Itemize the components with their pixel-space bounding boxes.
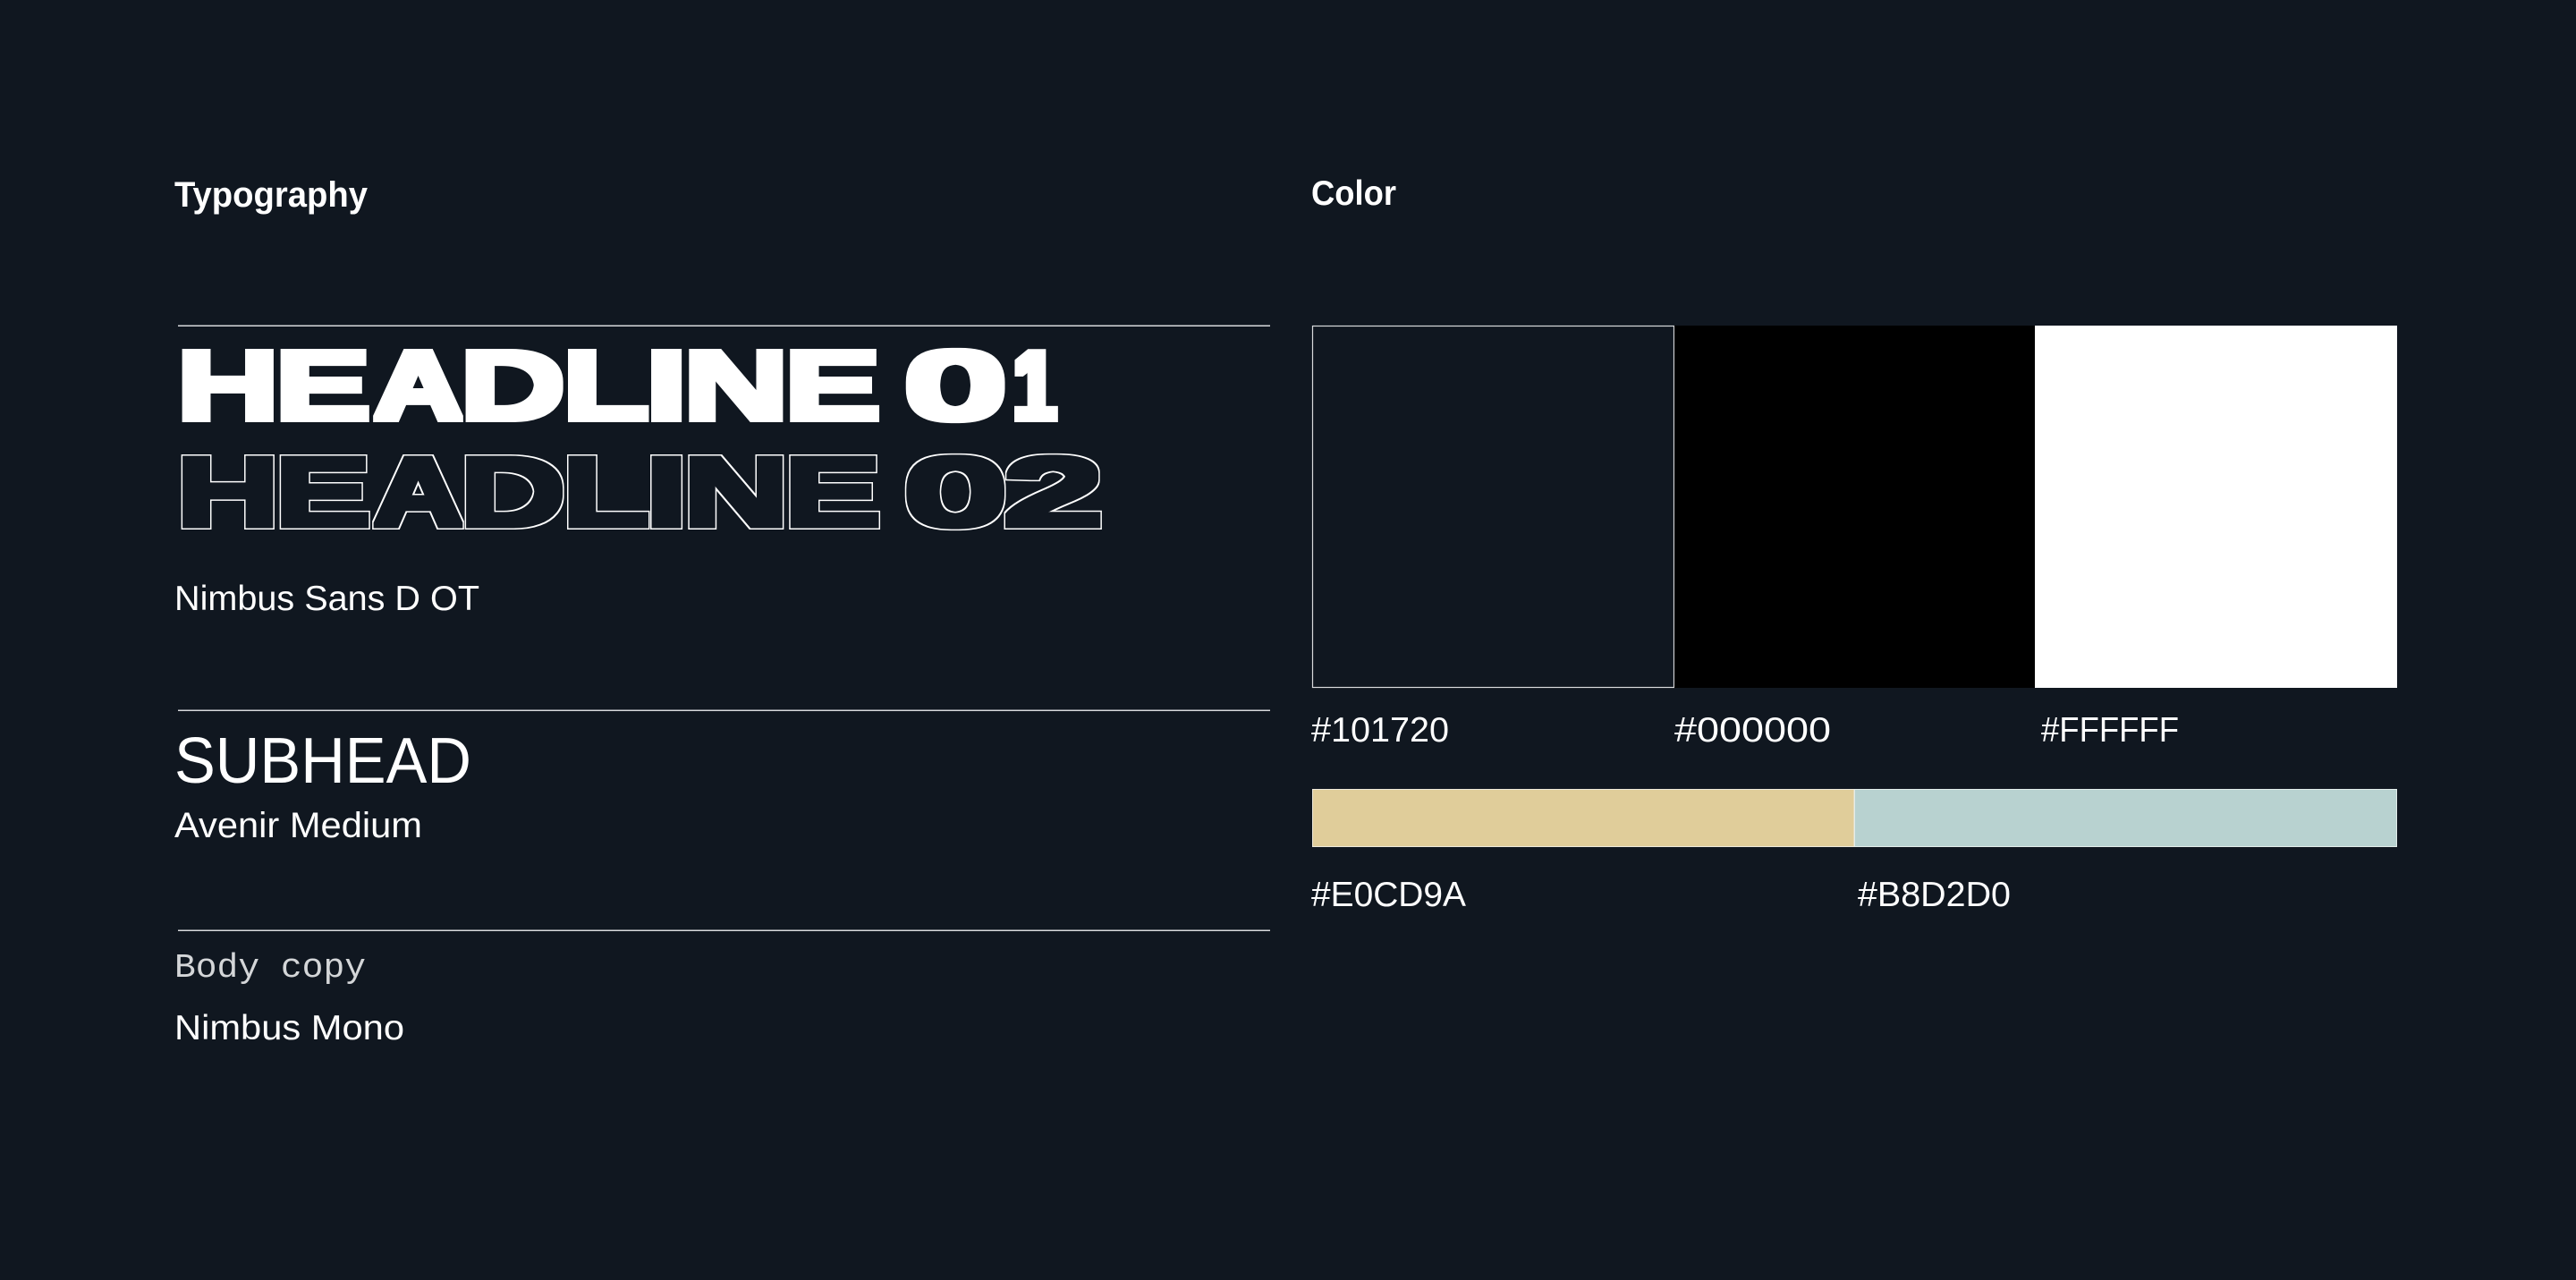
swatch: dark navy [1313, 326, 1674, 687]
label: #E0CD9A: #E0CD9A [1311, 876, 1466, 914]
headline 01 sample: E [275, 331, 371, 440]
font name: Nimbus Sans D OT: Nimbus Sans D OT [174, 580, 479, 618]
headline 01 sample: I [645, 331, 688, 440]
swatch: black [1674, 326, 2035, 688]
panel: typography [174, 175, 1270, 1047]
headline 02 outlined sample: H [177, 438, 279, 547]
font name: Nimbus Mono: Nimbus Mono [174, 1009, 404, 1047]
headline 02 outlined sample: N [683, 438, 789, 547]
headline 02 outlined sample: 2 [1003, 438, 1105, 547]
headline 02 outlined sample: A [374, 438, 462, 547]
headline 02 outlined sample: L [563, 438, 649, 547]
divider: subhead top [178, 710, 1270, 711]
headline 02 outlined sample: E [275, 438, 371, 547]
headline 02 outlined sample: D [460, 438, 565, 547]
label: #FFFFFF: #FFFFFF [2041, 711, 2179, 750]
divider: body copy top [178, 930, 1270, 931]
font name: Avenir Medium: Avenir Medium [174, 806, 422, 845]
heading: Color: Color [1311, 174, 1396, 213]
headline 01 sample: H [177, 331, 279, 440]
headline 02 outlined sample: E [784, 438, 881, 547]
subhead sample: SUBHEAD [174, 725, 471, 797]
headline 02 outlined sample: 0 [902, 438, 1009, 547]
headline 01 sample: L [563, 331, 649, 440]
heading: Typography: Typography [174, 175, 369, 215]
headline 01 sample: N [683, 331, 789, 440]
body copy sample: Body copy [174, 949, 366, 988]
panel: color [1311, 174, 2397, 914]
headline 01 sample: E [784, 331, 881, 440]
label: #B8D2D0: #B8D2D0 [1858, 876, 2011, 914]
headline 01 sample: A [374, 331, 462, 440]
swatch: white [2035, 326, 2397, 688]
headline 01 sample: 0 [902, 331, 1009, 440]
headline 01 sample: 1 [1013, 331, 1056, 440]
label: #101720: #101720 [1311, 711, 1449, 750]
headline 01 sample: D [460, 331, 565, 440]
headline 02 outlined sample: I [645, 438, 688, 547]
swatch: pale teal [1855, 789, 2397, 846]
label: #000000: #000000 [1674, 711, 1831, 750]
swatch: sand [1313, 789, 1854, 846]
